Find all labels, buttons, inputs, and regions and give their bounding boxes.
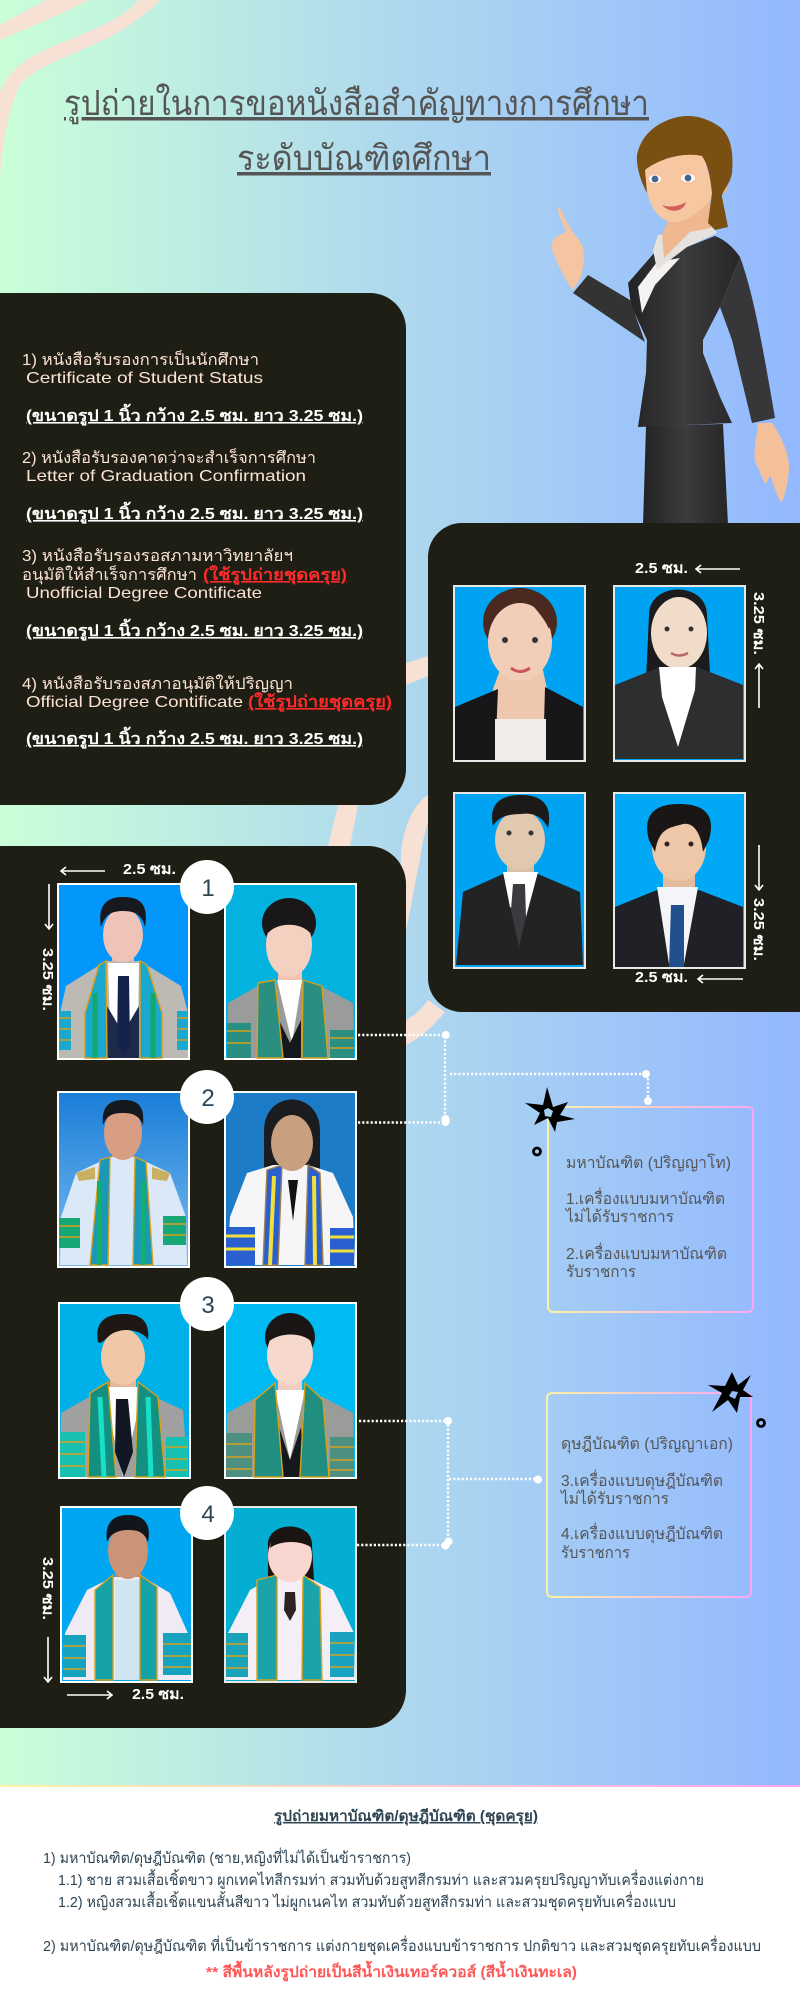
- title: [64, 83, 649, 178]
- notes text: [43, 1847, 761, 1956]
- item 4: (ใช้รูปถ่ายชุดครุย): [248, 692, 392, 713]
- photo: woman in grey suit: [614, 586, 745, 761]
- badge 4: 4: [201, 1501, 215, 1528]
- photo: man with blue tie: [614, 793, 745, 968]
- notes text: 1.1) ชาย สวมเสื้อเชิ้ตขาว ผูกเทคไทสีกรมท่า สวมทับด้วยสูทสีกรมท่า และสวมครุยปริญญาทับเครื่องแต่งกาย: [58, 1869, 704, 1890]
- callout: doctoral degree: 3.เครื่องแบบดุษฎีบัณฑิต: [561, 1469, 723, 1491]
- label: width top: [635, 560, 740, 577]
- photo 4 left: man white uniform: [61, 1507, 192, 1682]
- item 3: (ขนาดรูป 1 นิ้ว กว้าง 2.5 ซม. ยาว 3.25 ซม.): [26, 618, 363, 642]
- badge 1: [180, 860, 234, 914]
- badge 2: 2: [201, 1085, 215, 1112]
- item 2: Letter of Graduation Confirmation: [26, 468, 306, 485]
- label: height bottom: [39, 1557, 56, 1682]
- photo 4 right: woman white uniform: [225, 1507, 356, 1682]
- callout: master's degree: 2.เครื่องแบบมหาบัณฑิต: [566, 1242, 727, 1263]
- photo 1 right: woman gown: [225, 884, 356, 1059]
- badge 3: 3: [201, 1292, 215, 1319]
- item 2: [22, 447, 363, 525]
- item 2: 2) หนังสือรับรองคาดว่าจะสำเร็จการศึกษา: [22, 447, 316, 467]
- icon: scribble star: [525, 1087, 575, 1155]
- badge 1: 1: [201, 875, 215, 902]
- label: width top: 2.5 ซม.: [123, 861, 176, 878]
- item 2: (ขนาดรูป 1 นิ้ว กว้าง 2.5 ซม. ยาว 3.25 ซม.): [26, 501, 363, 525]
- label: width bottom: [635, 969, 743, 986]
- notes text: 1.2) หญิงสวมเสื้อเชิ้ตแขนสั้นสีขาว ไม่ผูกเนคไท สวมทับด้วยสูทสีกรมท่า และสวมชุดครุยทับเครื่องแบบ: [58, 1891, 676, 1912]
- item 1: [22, 349, 363, 427]
- decorative peach curves: [0, 0, 445, 1045]
- label: height top: 3.25 ซม.: [39, 948, 56, 1011]
- label: width bottom: 2.5 ซม.: [635, 969, 688, 986]
- panel: graduation gown sample photos: [0, 846, 406, 1728]
- callout: doctoral degree: [547, 1393, 751, 1597]
- item 3: (ใช้รูปถ่ายชุดครุย): [203, 565, 347, 586]
- notes text: 1) มหาบัณฑิต/ดุษฎีบัณฑิต (ชาย,หญิงที่ไม่ได้เป็นข้าราชการ): [43, 1847, 411, 1868]
- label: width bottom: 2.5 ซม.: [132, 1686, 184, 1703]
- item 3: 3) หนังสือรับรองรอสภามหาวิทยาลัยฯ: [22, 547, 293, 565]
- callout: doctoral degree: ดุษฎีบัณฑิต (ปริญญาเอก): [561, 1435, 733, 1454]
- icon: scribble star: [708, 1372, 764, 1426]
- label: height bottom: 3.25 ซม.: [750, 898, 767, 961]
- item 4: 4) หนังสือรับรองสภาอนุมัติให้ปริญญา: [22, 674, 293, 694]
- callout: doctoral degree: รับราชการ: [561, 1545, 630, 1562]
- item 1: 1) หนังสือรับรองการเป็นนักศึกษา: [22, 349, 259, 369]
- callout: master's degree: มหาบัณฑิต (ปริญญาโท): [566, 1153, 731, 1172]
- item 4: Official Degree Contificate: [26, 694, 243, 711]
- item 1: (ขนาดรูป 1 นิ้ว กว้าง 2.5 ซม. ยาว 3.25 ซม.): [26, 403, 363, 427]
- label: height bottom: 3.25 ซม.: [39, 1557, 56, 1620]
- background colour note: ** สีพื้นหลังรูปถ่ายเป็นสีน้ำเงินเทอร์ควอส์ (สีน้ำเงินทะเล): [206, 1960, 577, 1982]
- photo 3 left: man gown: [59, 1303, 190, 1478]
- item 3: [22, 547, 363, 642]
- item 1: Certificate of Student Status: [26, 370, 263, 387]
- badge 4: [180, 1486, 234, 1540]
- badge 2: [180, 1070, 234, 1124]
- notes heading: รูปถ่ายมหาบัณฑิต/ดุษฎีบัณฑิต (ชุดครุย): [274, 1807, 538, 1826]
- photo 1 left: man gown: [58, 884, 189, 1059]
- photo: man with patterned tie: [454, 793, 585, 968]
- photo 2 right: woman white uniform: [225, 1092, 356, 1267]
- item 3: อนุมัติให้สำเร็จการศึกษา: [22, 564, 197, 585]
- photo: woman in black blazer: [454, 586, 585, 761]
- photo 3 right: woman gown: [225, 1303, 356, 1478]
- badge 3: [180, 1277, 234, 1331]
- title: รูปถ่ายในการขอหนังสือสำคัญทางการศึกษา: [64, 83, 649, 124]
- callout: master's degree: 1.เครื่องแบบมหาบัณฑิต: [566, 1187, 725, 1208]
- label: height bottom: [750, 845, 767, 961]
- callout: master's degree: รับราชการ: [566, 1264, 636, 1281]
- label: width top: [61, 861, 176, 878]
- panel: list of documents: [0, 293, 406, 805]
- notes text: 2) มหาบัณฑิต/ดุษฎีบัณฑิต ที่เป็นข้าราชการ แต่งกายชุดเครื่องแบบข้าราชการ ปกติขาว และสวมชุดครุยทับเครื่องแบบ: [43, 1935, 761, 1956]
- label: height top: 3.25 ซม.: [750, 592, 767, 655]
- label: height top: [39, 884, 56, 1011]
- callout: master's degree: [548, 1107, 753, 1312]
- item 4: [22, 674, 392, 750]
- callout: doctoral degree: ไม่ได้รับราชการ: [559, 1489, 669, 1508]
- title: ระดับบัณฑิตศึกษา: [237, 139, 491, 178]
- callout: doctoral degree: 4.เครื่องแบบดุษฎีบัณฑิต: [561, 1522, 723, 1544]
- item 3: Unofficial Degree Contificate: [26, 585, 262, 602]
- connector: doctoral photos to box: [357, 1417, 542, 1550]
- label: width bottom: [67, 1686, 184, 1703]
- photo 2 left: man white uniform: [58, 1092, 189, 1267]
- connector: master's photos to box: [358, 1031, 652, 1126]
- label: width top: 2.5 ซม.: [635, 560, 688, 577]
- illustration: businesswoman pointing up: [552, 116, 789, 525]
- callout: master's degree: ไม่ได้รับราชการ: [564, 1207, 674, 1226]
- panel: graduation photo notes: [0, 1785, 800, 2000]
- label: height top: [750, 592, 767, 708]
- panel: business-suit sample photos: [428, 523, 800, 1012]
- item 4: (ขนาดรูป 1 นิ้ว กว้าง 2.5 ซม. ยาว 3.25 ซม.): [26, 726, 363, 750]
